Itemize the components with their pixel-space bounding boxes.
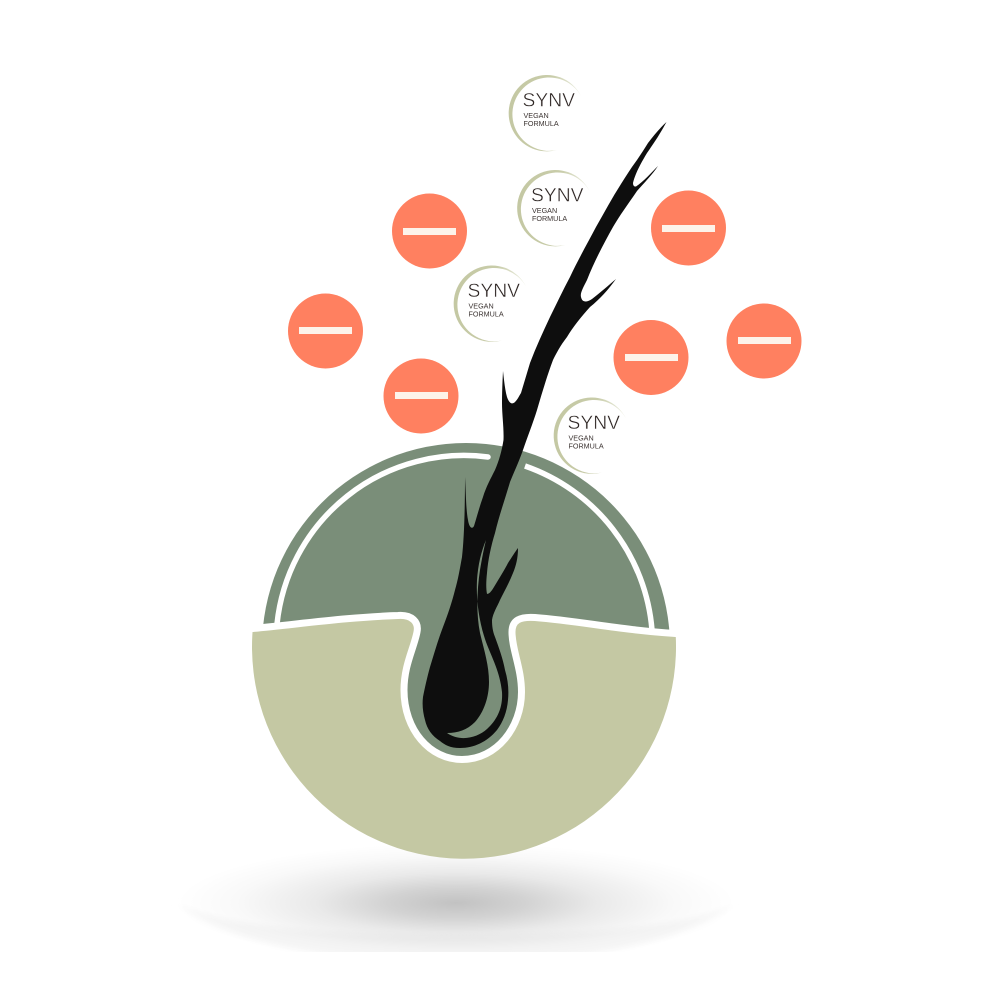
SYNV logo 4: FORMULA xyxy=(568,442,604,450)
SYNV logo 4 xyxy=(554,397,626,474)
white inner arc, left xyxy=(277,455,488,624)
SYNV logo 3 xyxy=(454,265,526,342)
skin layer: beige lower bowl with follicle pocket xyxy=(252,615,676,859)
scalp dome: green circle behind the skin layer xyxy=(262,443,670,851)
SYNV logo 3: VEGAN xyxy=(468,302,494,310)
SYNV logo 1: FORMULA xyxy=(524,119,559,128)
SYNV logo 4: SYNV xyxy=(568,413,620,434)
SYNV logo 3: FORMULA xyxy=(468,310,504,318)
SYNV logo 1 xyxy=(509,75,581,151)
white inner arc, right xyxy=(525,466,652,630)
SYNV logo 2: FORMULA xyxy=(532,214,567,223)
SYNV logo 2: SYNV xyxy=(531,186,584,206)
SYNV logo 1: VEGAN xyxy=(524,111,549,120)
green sliver inside root xyxy=(447,540,502,738)
SYNV logo 3: SYNV xyxy=(468,281,520,302)
minus badge 5 xyxy=(614,320,688,395)
white outline of skin surface and pocket xyxy=(250,615,680,760)
follicle diagram xyxy=(250,122,680,859)
ground shadow xyxy=(211,858,699,952)
minus badge 6 xyxy=(726,304,802,378)
SYNV logo 1: SYNV xyxy=(522,90,575,112)
SYNV logo 2 xyxy=(517,170,590,246)
SYNV logo 2: VEGAN xyxy=(532,206,557,215)
minus badge 2 xyxy=(651,190,726,266)
SYNV logo 4: VEGAN xyxy=(568,434,594,442)
minus badge 4 xyxy=(384,358,458,434)
hair strand with root bulb xyxy=(423,122,666,748)
minus badge 1 xyxy=(392,194,467,268)
minus badge 3 xyxy=(288,294,363,368)
